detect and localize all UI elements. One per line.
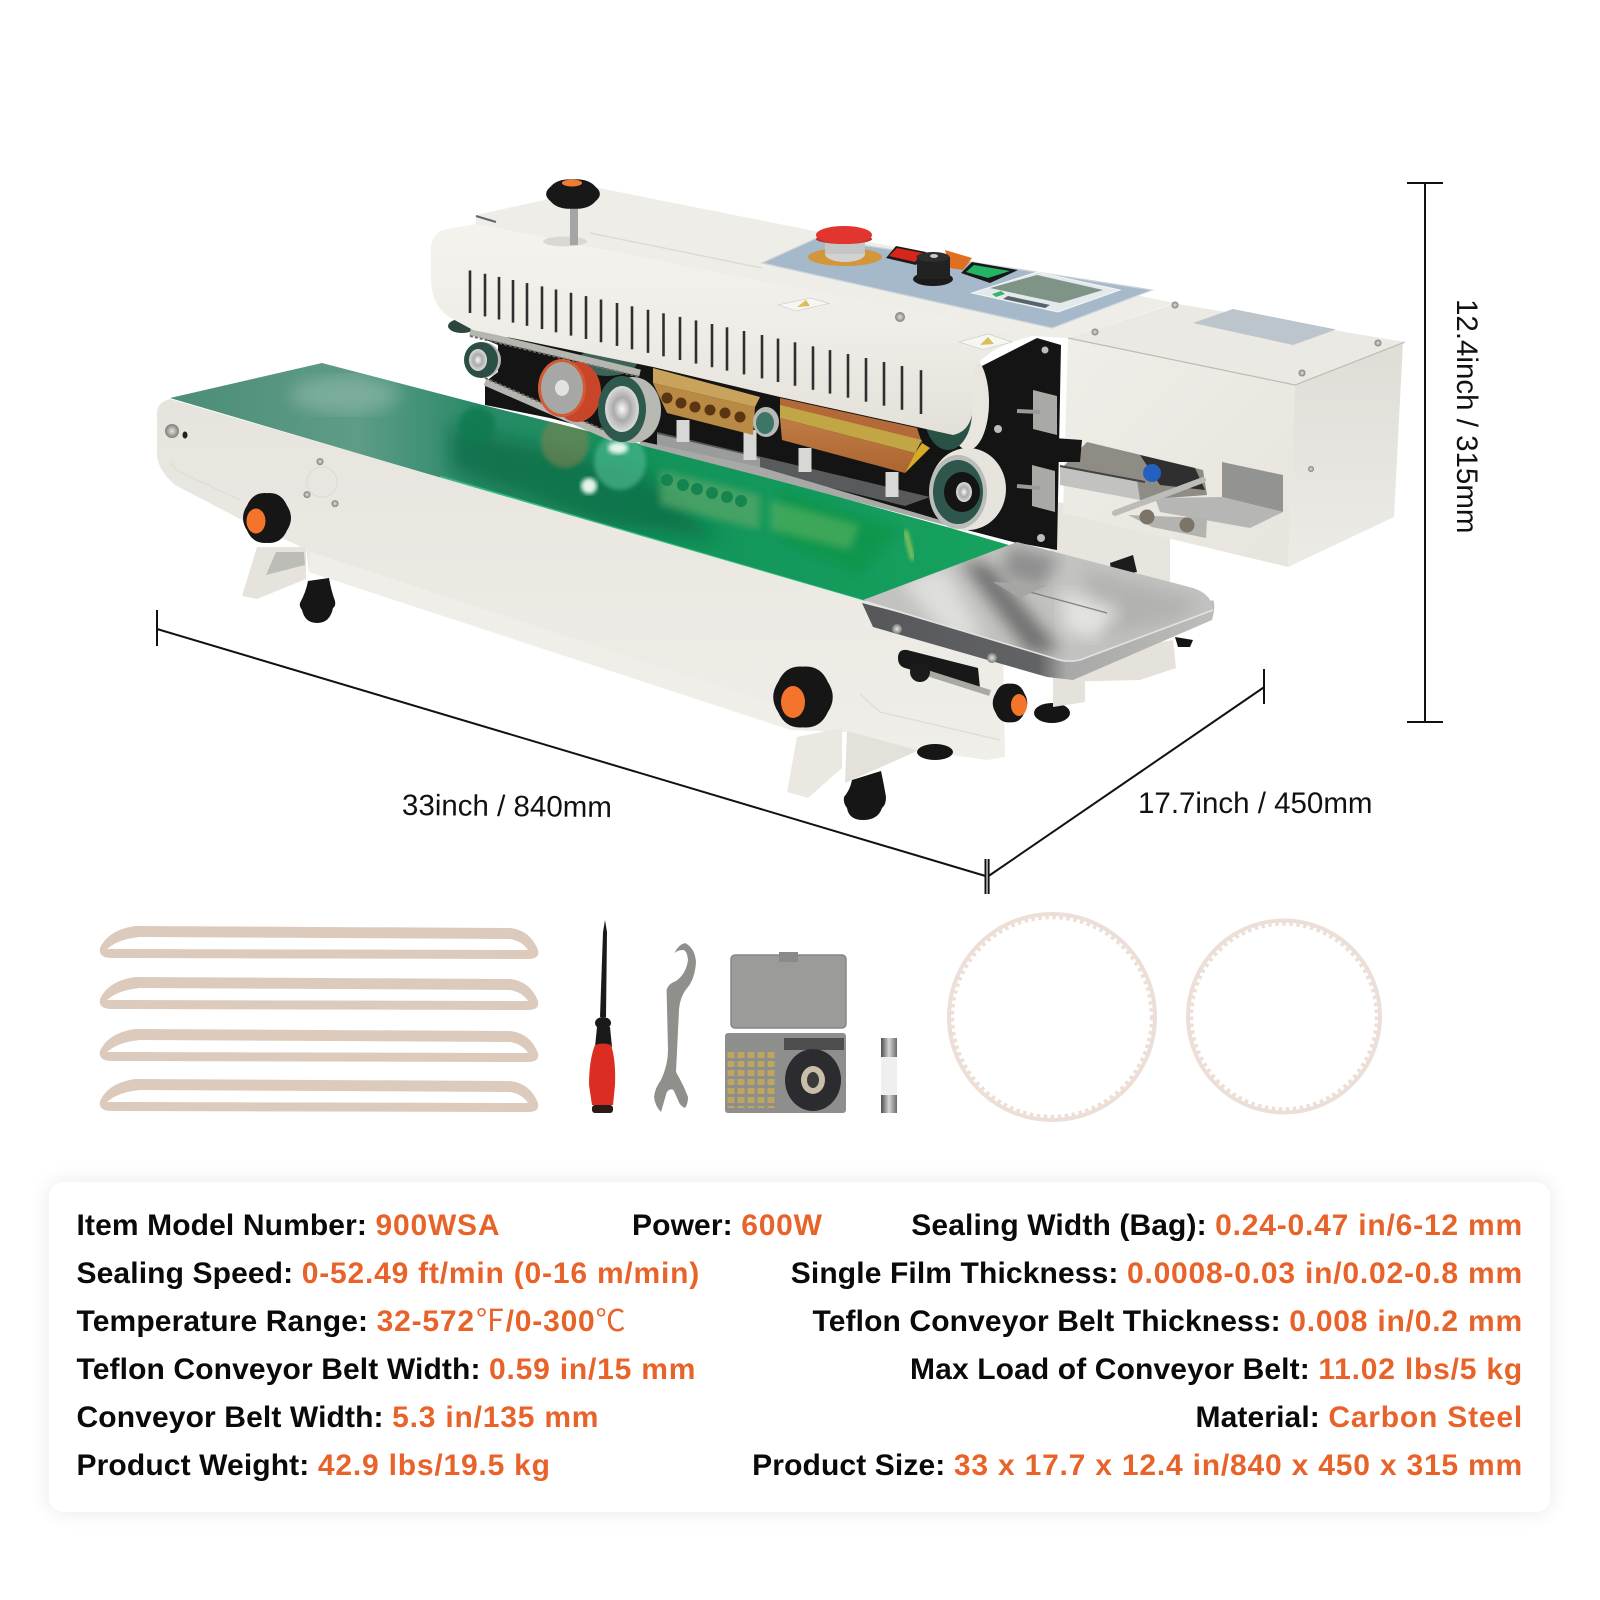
vent slots (470, 270, 921, 414)
ink roll (785, 1049, 841, 1111)
machine illustration: band sealer (100, 179, 1443, 1122)
conveyor side panel (157, 399, 1005, 783)
small left roller (464, 342, 501, 378)
top adjustment knob (543, 179, 600, 246)
sealing head cover with vent slots (431, 224, 1032, 435)
accessory: code letter box (725, 952, 846, 1113)
under tray bracket (1053, 640, 1176, 707)
spec: item model number: Item Model Number: 900WSA (76, 1209, 500, 1242)
spec: product size: Product Size: 33 x 17.7 x 12.4 in/840 x 450 x 315 mm (752, 1449, 1523, 1482)
electrical box (1060, 302, 1405, 567)
accessory: wrench (654, 943, 696, 1112)
speed knob (913, 252, 953, 286)
side panel embossed lines (170, 462, 1000, 740)
right knob (773, 666, 833, 728)
chute floor (1155, 497, 1283, 528)
spec: conveyor belt width: Conveyor Belt Width: 5.3 in/135 mm (76, 1401, 599, 1434)
right stand and foot (787, 728, 953, 820)
tray surface (863, 542, 1213, 661)
red timing pulley (538, 359, 601, 422)
small chrome guide roller (753, 407, 779, 437)
red power switch (886, 246, 926, 265)
width dimension line (986, 669, 1264, 894)
orange indicator (945, 250, 972, 270)
specifications panel (49, 1182, 1550, 1512)
height dimension line (1407, 183, 1443, 722)
adjustment slot and rod (898, 650, 990, 693)
rollers behind head (577, 348, 637, 376)
silver base bar (640, 441, 967, 531)
top plate of sealing head (476, 188, 1175, 338)
spec: temperature range: Temperature Range: 32-572℉/0-300℃ (76, 1305, 626, 1338)
accessory: timing belt small (1188, 920, 1380, 1112)
sealing mechanism backing plate (448, 319, 1082, 550)
spec: sealing width: Sealing Width (Bag): 0.24-0.47 in/6-12 mm (911, 1209, 1523, 1242)
belt reflections (290, 377, 913, 601)
spec: teflon belt thickness: Teflon Conveyor Belt Thickness: 0.008 in/0.2 mm (812, 1305, 1523, 1338)
temperature controller (972, 272, 1120, 312)
spec: power: Power: 600W (632, 1209, 823, 1242)
conveyor green belt (170, 363, 1019, 602)
box outlet opening (1060, 442, 1283, 538)
depth dimension line (157, 610, 986, 876)
guide rod (1115, 480, 1203, 513)
emergency stop button (808, 226, 882, 266)
small tray foot (1175, 637, 1193, 647)
left stand and foot (242, 547, 335, 623)
large right roller (929, 448, 1006, 530)
warning stickers (778, 298, 1012, 350)
dimension label: height: 12.4inch / 315mm (1450, 299, 1483, 534)
left knob (243, 493, 291, 543)
chrome mounting plate (657, 432, 930, 506)
chute back wall (1222, 462, 1283, 512)
spec: single film thickness: Single Film Thickness: 0.0008-0.03 in/0.02-0.8 mm (791, 1257, 1523, 1290)
tray foot (1034, 703, 1070, 723)
brass type letters (731, 1052, 771, 1108)
copper cooling block (780, 398, 930, 473)
pillar under electrical box (1050, 500, 1170, 590)
spec: sealing speed: Sealing Speed: 0-52.49 ft/min (0-16 m/min) (76, 1257, 700, 1290)
dimension label: width: 17.7inch / 450mm (1138, 787, 1372, 820)
spec: max load: Max Load of Conveyor Belt: 11.02 lbs/5 kg (910, 1353, 1523, 1386)
box rating label (1193, 309, 1336, 345)
mounting bracket (1128, 515, 1207, 538)
accessory: timing belt large (949, 914, 1155, 1120)
cable behind outlet (1040, 437, 1082, 462)
small screws (304, 458, 338, 507)
end bolt (165, 424, 179, 438)
support pins (683, 420, 892, 497)
spec: teflon belt width: Teflon Conveyor Belt Width: 0.59 in/15 mm (76, 1353, 696, 1386)
spec: product weight: Product Weight: 42.9 lbs/19.5 kg (76, 1449, 551, 1482)
spec: material: Material: Carbon Steel (1195, 1401, 1523, 1434)
gold heating block (653, 368, 760, 435)
upper right roller (924, 354, 989, 450)
front rim (862, 600, 1214, 680)
green switch (961, 262, 1018, 283)
large chrome roller left (598, 376, 661, 443)
stainless steel tray (862, 542, 1214, 680)
accessory: fuse (881, 1038, 897, 1113)
control panel (762, 226, 1152, 328)
small right knob (993, 684, 1027, 722)
accessory: four sealing belts (100, 926, 538, 1112)
dimension label: depth: 33inch / 840mm (402, 789, 612, 824)
box rivets (1092, 302, 1382, 472)
right brackets (1017, 390, 1057, 512)
surface reflections (900, 545, 1200, 655)
timing belts (470, 332, 640, 438)
accessory: screwdriver (589, 920, 615, 1113)
